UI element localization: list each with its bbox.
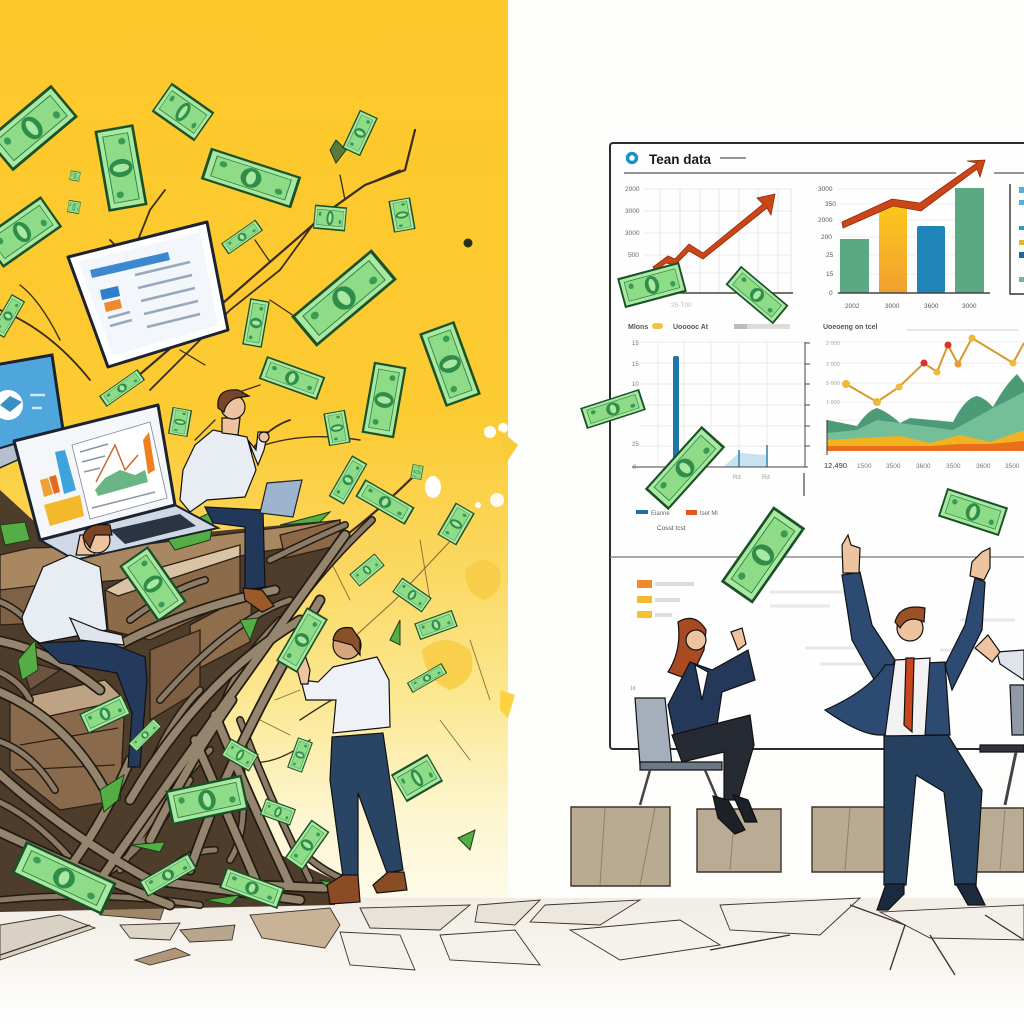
- chart: bar chart: 3600: [924, 303, 939, 310]
- yellow left background: [0, 0, 508, 920]
- floor: [0, 898, 1024, 1024]
- person: far right arm and desk: [975, 635, 1024, 805]
- sub headings: [628, 323, 1018, 331]
- legend column: [1010, 184, 1024, 294]
- chart legend: tset Ml: [700, 511, 718, 517]
- chart: rising line grid: [625, 186, 793, 309]
- sub headings: Uoeoeng on tcel: [823, 324, 878, 331]
- chart: stacked area with line: 1500: [857, 463, 872, 470]
- chart: bar chart: 3000: [962, 303, 977, 310]
- title: Tean data: [649, 152, 712, 167]
- chart: blue column chart: Rd: [762, 475, 770, 481]
- chart: stacked area with line: 5 000: [826, 381, 840, 387]
- arrow: red growth over bars: [842, 160, 985, 228]
- chart legend: Eianne: [651, 511, 670, 517]
- lower legend rows: [630, 580, 1015, 692]
- chart: bar chart: 350: [825, 201, 836, 208]
- falling bills right: [580, 262, 1008, 604]
- chart: blue column chart: Rd: [733, 475, 741, 481]
- chart: stacked area with line: 2 000: [826, 341, 840, 347]
- chart: bar chart: 3000: [885, 303, 900, 310]
- laptop: large analytics: [14, 405, 218, 560]
- person: man seated left: [22, 525, 147, 767]
- chart: bar chart: 3000: [818, 186, 833, 193]
- person: man seated on ledge: [180, 390, 302, 612]
- green leaves: [0, 140, 475, 905]
- chart: bar chart: [818, 160, 990, 310]
- person: celebrating man: [825, 535, 990, 910]
- chart: rising line grid: 3000: [625, 208, 640, 215]
- paint splashes: [422, 423, 518, 718]
- chart: stacked area with line: 2 000: [826, 362, 840, 368]
- paving stones: [0, 898, 1024, 970]
- chart: stacked area with line: 3500: [946, 463, 961, 470]
- chart: rising line grid: 500: [628, 252, 639, 259]
- chart: stacked area with line: 12,490: [824, 461, 847, 470]
- chart: bar chart: 0: [829, 290, 833, 297]
- person: standing man: [296, 628, 407, 904]
- chart: stacked area with line: 3600: [976, 463, 991, 470]
- lower legend rows: 16: [630, 686, 636, 692]
- arrow: red growth: [653, 194, 775, 271]
- sub headings: Uooooc At: [673, 324, 709, 331]
- header rule: [624, 158, 1024, 173]
- laptop: floating report tablet: [68, 222, 228, 367]
- person: seated woman: [635, 618, 757, 834]
- sub headings: Mlons: [628, 324, 648, 331]
- chart legend: [636, 510, 718, 532]
- wood and root pile: [0, 490, 372, 912]
- chart: bar chart: 200: [821, 234, 832, 241]
- chart legend: Cosst tcst: [657, 525, 686, 532]
- cardboard crates: [571, 807, 1024, 886]
- chart: bar chart: 25: [826, 252, 834, 259]
- panel: dashboard board: [610, 143, 1024, 749]
- icon: blue dot: [628, 154, 636, 162]
- laptop: blue screen: [0, 355, 63, 470]
- divider: [610, 556, 1024, 558]
- chart: stacked area with line: [824, 334, 1024, 470]
- chart: stacked area with line: 3500: [886, 463, 901, 470]
- chart: bar chart: 15: [826, 271, 834, 278]
- chart: rising line grid: 3000: [625, 230, 640, 237]
- chart: rising line grid: 25-T00: [671, 302, 692, 309]
- chart: blue column chart: 25: [632, 442, 639, 448]
- office chair: [635, 698, 722, 805]
- dry branches on yellow: [0, 130, 490, 762]
- chart: blue column chart: 10: [632, 382, 639, 388]
- chart: stacked area with line: 3500: [1005, 463, 1020, 470]
- falling bills left: [0, 83, 481, 915]
- chart: blue column chart: 15: [632, 362, 639, 368]
- chart: blue column chart: 0: [633, 465, 637, 471]
- bricks: [0, 520, 340, 810]
- chart: stacked area with line: 1 000: [826, 400, 840, 406]
- chart: stacked area with line: 3600: [916, 463, 931, 470]
- chart: rising line grid: 2000: [625, 186, 640, 193]
- chart: blue column chart: 15: [632, 341, 639, 347]
- chart: bar chart: 2000: [818, 217, 833, 224]
- chart: blue column chart: [632, 341, 810, 496]
- chart: bar chart: 2002: [845, 303, 860, 310]
- small laptop: [260, 480, 302, 517]
